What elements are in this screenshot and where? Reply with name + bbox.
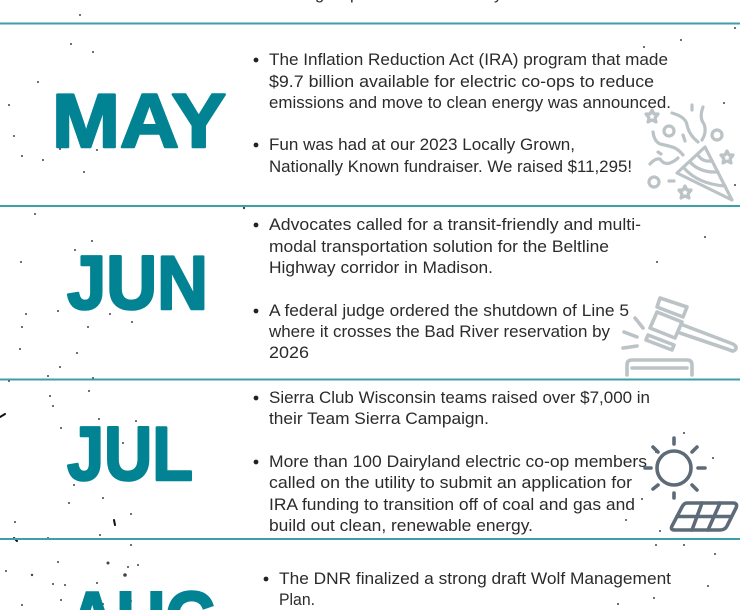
panel: July xyxy=(67,389,737,535)
text block: July bullets: their Team Sierra Campaign. xyxy=(269,410,489,428)
text block: August bullets: The DNR finalized a strong draft Wolf Management xyxy=(279,570,671,588)
panel: August xyxy=(264,570,671,609)
text block: August bullets xyxy=(264,570,671,609)
text block: July bullets: More than 100 Dairyland electric co-op members xyxy=(269,453,647,471)
text block: June bullets: Advocates called for a transit-friendly and multi- xyxy=(269,216,641,234)
text block: July bullets: IRA funding to transition off of coal and gas and xyxy=(269,496,635,514)
text block: July bullets: called on the utility to submit an application for xyxy=(269,474,633,492)
text block: June bullets: where it crosses the Bad River reservation by xyxy=(268,323,611,341)
text block: July bullets: Sierra Club Wisconsin teams raised over $7,000 in xyxy=(269,389,650,407)
heading: MAY: MAY xyxy=(52,79,226,164)
icon: gavel xyxy=(623,298,736,375)
text block: May bullets: $9.7 billion available for electric co-ops to reduce xyxy=(269,73,654,91)
text block: June bullets: Highway corridor in Madison. xyxy=(269,259,493,277)
text block: June bullets: A federal judge ordered the shutdown of Line 5 xyxy=(269,302,629,320)
text block: July bullets xyxy=(254,389,650,535)
text block: August bullets: Plan. xyxy=(279,591,315,609)
heading: JUL: JUL xyxy=(67,412,193,497)
text block: May bullets xyxy=(254,51,671,176)
icon: sun and solar panel xyxy=(645,438,737,530)
text block: June bullets: 2026 xyxy=(269,344,309,362)
text block: July bullets: build out clean, renewable energy. xyxy=(269,517,533,535)
text block: May bullets: Fun was had at our 2023 Locally Grown, xyxy=(269,136,575,154)
text block: May bullets: The Inflation Reduction Act (IRA) program that made xyxy=(269,51,668,69)
clipped text line from previous section xyxy=(315,0,503,3)
panel: May xyxy=(52,51,733,200)
icon: party popper xyxy=(646,105,733,200)
text block: May bullets: Nationally Known fundraiser. We raised $11,295! xyxy=(269,158,632,176)
heading: JUN: JUN xyxy=(67,241,208,326)
text block: June bullets: modal transportation solution for the Beltline xyxy=(269,238,609,256)
panel: June xyxy=(67,216,736,375)
text block: June bullets xyxy=(254,216,641,362)
text block: May bullets: emissions and move to clean energy was announced. xyxy=(269,94,671,112)
